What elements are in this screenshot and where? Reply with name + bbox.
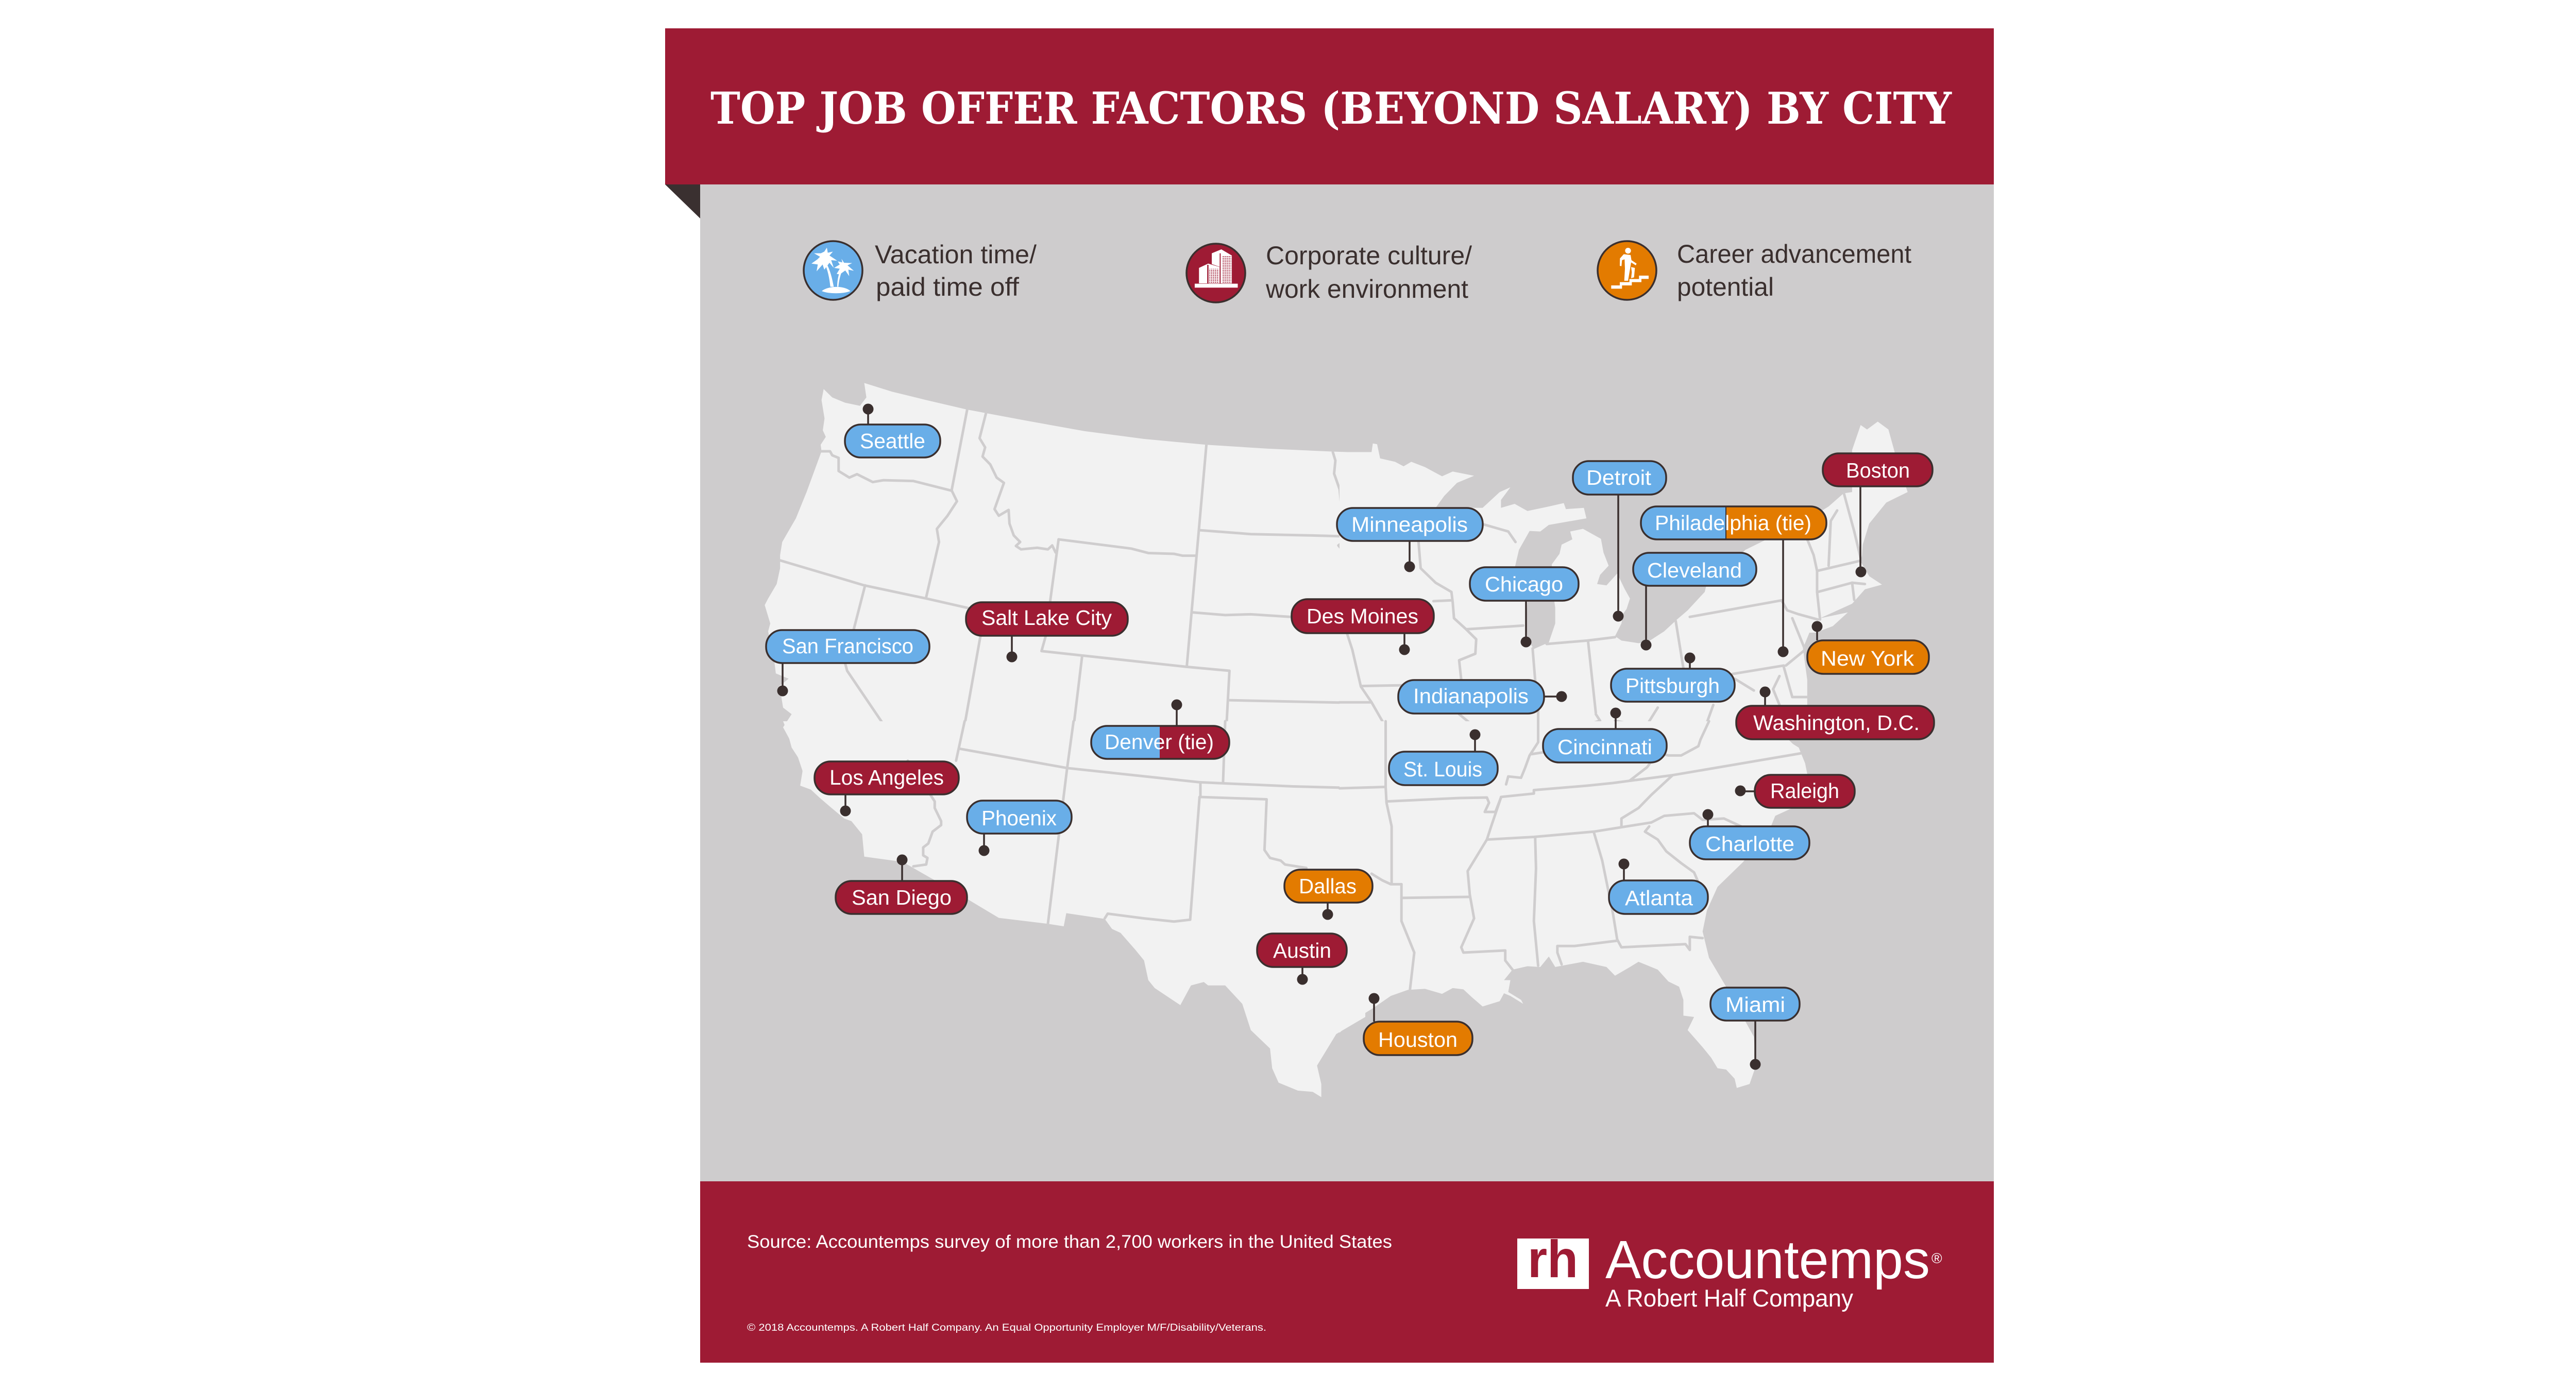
- city pin: Atlanta (vacation time): Atlanta: [1625, 886, 1693, 910]
- legend item: corporate culture: Corporate culture/: [1266, 241, 1472, 270]
- city pin: Los Angeles (corporate culture): [815, 761, 959, 816]
- city pin: Philadelphia tie (vacation time and career advancement): [1641, 506, 1826, 657]
- logo: Accountemps: Accountemps: [1605, 1230, 1930, 1290]
- city pin: Houston (career advancement): Houston: [1378, 1028, 1458, 1051]
- legend item: career advancement: potential: [1677, 273, 1774, 301]
- title banner: TOP JOB OFFER FACTORS (BEYOND SALARY) BY CITY: [710, 83, 1952, 134]
- city pin: Los Angeles (corporate culture): Los Angeles: [829, 766, 944, 789]
- city pin: New York (career advancement): New York: [1821, 647, 1914, 670]
- city pin: Salt Lake City (corporate culture): [966, 602, 1128, 663]
- legend item: career advancement: [1598, 240, 1911, 301]
- city pin: Atlanta (vacation time): [1609, 858, 1708, 914]
- city pin: San Francisco (vacation time): [766, 630, 929, 697]
- city pin: Phoenix (vacation time): [967, 801, 1072, 856]
- city pin: Raleigh (corporate culture): Raleigh: [1770, 779, 1839, 803]
- city pin: Pittsburgh (vacation time): [1611, 652, 1735, 702]
- legend item: vacation time: [804, 240, 1037, 301]
- logo: Accountemps: ®: [1931, 1250, 1942, 1266]
- city pin: Dallas (career advancement): Dallas: [1299, 874, 1357, 898]
- logo: Accountemps: rh: [1528, 1230, 1578, 1288]
- city pin: Cincinnati (vacation time): [1543, 708, 1667, 762]
- source note: Source: Accountemps survey of more than 2,700 workers in the United States: [747, 1232, 1392, 1252]
- city pin: Cleveland (vacation time): Cleveland: [1647, 558, 1742, 582]
- city pin: Raleigh (corporate culture): [1735, 775, 1855, 808]
- city pin: Chicago (vacation time): [1470, 567, 1579, 647]
- city pin: Chicago (vacation time): Chicago: [1485, 572, 1563, 596]
- city pin: Washington, D.C. (corporate culture): Washington, D.C.: [1753, 711, 1920, 735]
- city pin: Minneapolis (vacation time): [1337, 508, 1483, 572]
- city pin: Austin (corporate culture): [1257, 934, 1347, 985]
- city pin: Detroit (vacation time): [1573, 461, 1666, 621]
- city pin: Pittsburgh (vacation time): Pittsburgh: [1625, 674, 1720, 698]
- legend item: career advancement: Career advancement: [1677, 240, 1911, 268]
- city pin: Detroit (vacation time): Detroit: [1586, 466, 1652, 489]
- map: contiguous United States: [765, 383, 1908, 1097]
- city pin: Cleveland (vacation time): [1633, 553, 1756, 650]
- panel: grey map background: [700, 184, 1994, 1182]
- city pin: Charlotte (vacation time): Charlotte: [1705, 832, 1794, 856]
- city pin: San Diego (corporate culture): San Diego: [852, 886, 952, 909]
- city pin: Denver tie (vacation time and corporate culture): [1091, 700, 1229, 759]
- city pin: Dallas (career advancement): [1284, 870, 1372, 920]
- city pin: Cincinnati (vacation time): Cincinnati: [1557, 735, 1652, 759]
- city pin: Seattle (vacation time): Seattle: [860, 429, 925, 453]
- city pin: Indianapolis (vacation time): Indianapolis: [1413, 684, 1529, 708]
- city pin: Philadelphia tie (vacation time and career advancement): Philadelphia (tie): [1655, 511, 1811, 535]
- legend item: vacation time: Vacation time/: [875, 240, 1037, 269]
- city pin: Phoenix (vacation time): Phoenix: [981, 806, 1057, 830]
- city pin: Denver tie (vacation time and corporate culture): Denver (tie): [1105, 730, 1214, 754]
- legend item: corporate culture: [1187, 241, 1472, 303]
- city pin: St. Louis (vacation time): [1389, 730, 1498, 785]
- panel: footer: [700, 1181, 1994, 1363]
- city pin: Miami (vacation time): Miami: [1725, 993, 1785, 1016]
- city pin: Seattle (vacation time): [845, 404, 940, 457]
- title banner: [665, 28, 1994, 218]
- city pin: Des Moines (corporate culture): Des Moines: [1307, 604, 1418, 628]
- city pin: Boston (corporate culture): Boston: [1846, 459, 1910, 482]
- city pin: New York (career advancement): [1807, 621, 1929, 674]
- city pin: Washington, D.C. (corporate culture): [1736, 686, 1934, 739]
- city pin: Houston (career advancement): [1364, 993, 1472, 1055]
- city pin: San Diego (corporate culture): [836, 854, 967, 914]
- logo: Accountemps: A Robert Half Company: [1605, 1284, 1853, 1312]
- city pin: St. Louis (vacation time): St. Louis: [1403, 757, 1482, 781]
- city pin: Minneapolis (vacation time): Minneapolis: [1351, 513, 1468, 536]
- logo: Accountemps: [1517, 1230, 1942, 1312]
- city pin: Miami (vacation time): [1710, 988, 1800, 1070]
- city pin: Indianapolis (vacation time): [1398, 680, 1567, 714]
- city pin: Austin (corporate culture): Austin: [1273, 939, 1331, 962]
- copyright line: © 2018 Accountemps. A Robert Half Company. An Equal Opportunity Employer M/F/Disability/Veterans.: [747, 1322, 1266, 1333]
- city pin: Boston (corporate culture): [1823, 453, 1933, 577]
- legend item: vacation time: paid time off: [876, 273, 1019, 301]
- city pin: Charlotte (vacation time): [1690, 809, 1809, 859]
- legend: [804, 240, 1911, 303]
- legend item: corporate culture: work environment: [1265, 275, 1468, 303]
- city pin: Salt Lake City (corporate culture): Salt Lake City: [981, 606, 1112, 630]
- city pin: Des Moines (corporate culture): [1292, 599, 1434, 655]
- city pin: San Francisco (vacation time): San Francisco: [782, 634, 913, 658]
